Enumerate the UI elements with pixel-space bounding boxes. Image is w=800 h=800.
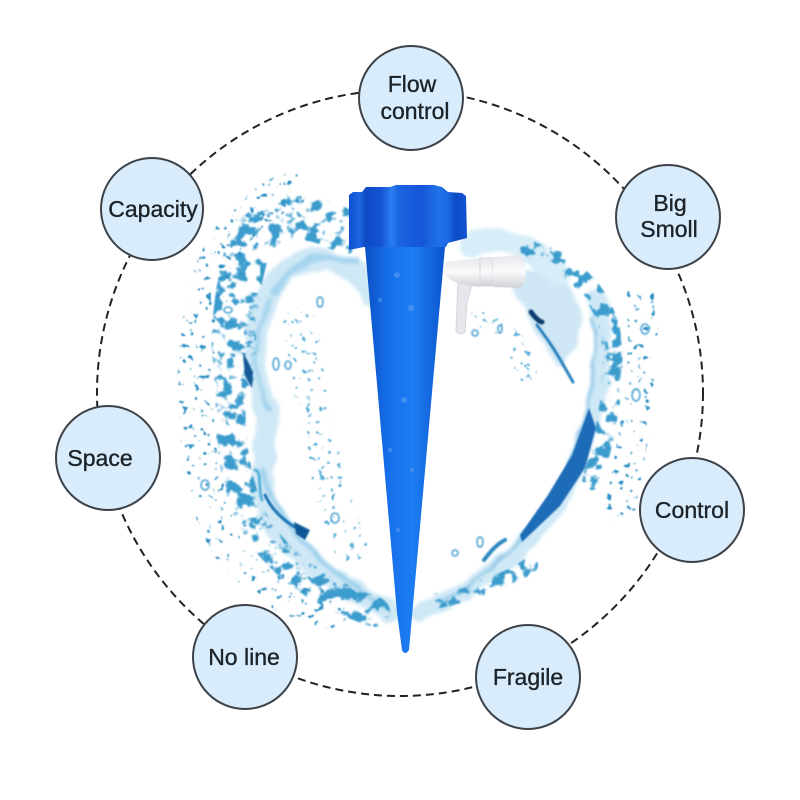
feature: Space	[56, 406, 160, 510]
feature: No line: No line	[208, 644, 280, 670]
water splash: heart-shaped ring	[195, 190, 649, 612]
water: dark accents	[243, 312, 596, 560]
spike cap	[349, 185, 467, 250]
feature: Fragile: Fragile	[493, 664, 563, 690]
dashed ring	[97, 90, 703, 696]
irrigation spike	[349, 185, 526, 653]
water droplets on body	[378, 272, 414, 532]
feature: Big Smoll: Smoll	[640, 216, 698, 242]
feature: No line	[193, 605, 297, 709]
valve thread	[480, 258, 493, 286]
feature: Big Smoll	[616, 165, 720, 269]
feature: Flow control: Flow	[388, 71, 437, 97]
feature: Fragile	[476, 625, 580, 729]
white valve	[443, 255, 526, 334]
water droplets	[201, 297, 649, 556]
water: soft light base	[255, 240, 601, 612]
water: broken splash fragments	[231, 218, 612, 612]
valve nut	[493, 255, 526, 288]
valve stem	[443, 257, 490, 287]
feature: Control: Control	[655, 497, 729, 523]
valve spout	[456, 283, 472, 334]
spike body	[365, 247, 445, 653]
feature: Space: Space	[67, 445, 133, 471]
feature: Flow control: control	[380, 98, 450, 124]
feature: Control	[640, 458, 744, 562]
feature: Flow control	[359, 46, 463, 150]
feature: Capacity	[101, 158, 203, 260]
water: fine droplet speckle	[195, 190, 643, 610]
feature: Capacity: Capacity	[108, 196, 198, 222]
feature: Big Smoll: Big	[653, 190, 687, 216]
